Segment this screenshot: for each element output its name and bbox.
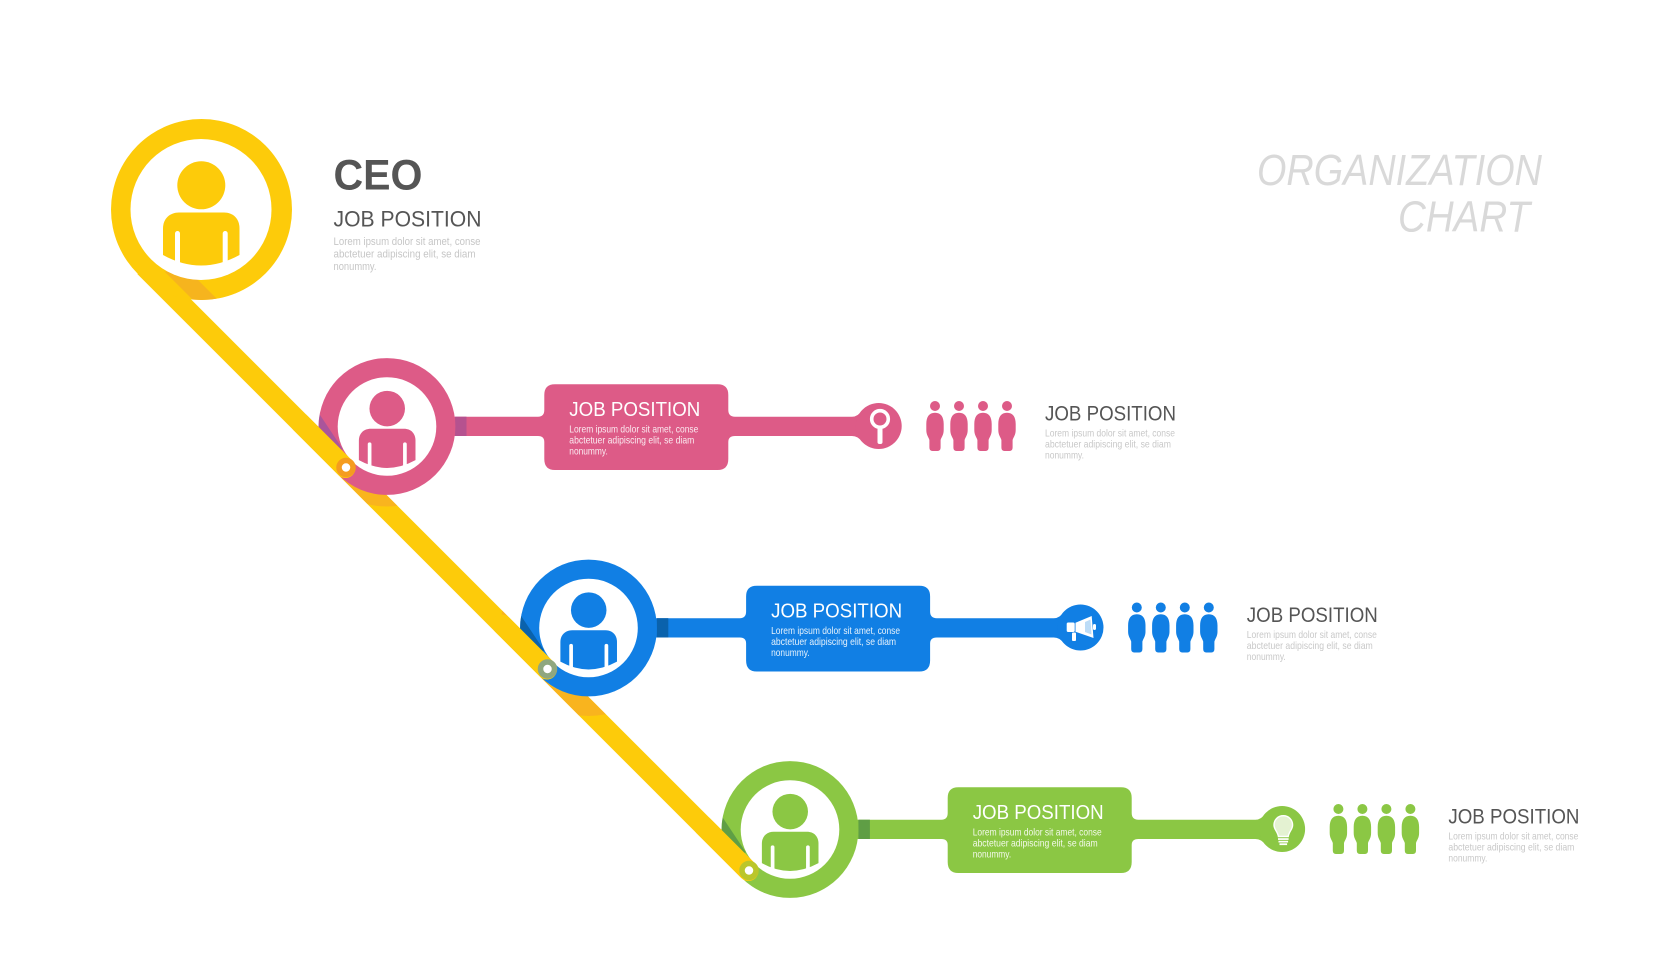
panel: blue position <box>494 560 1376 716</box>
yellow reporting line <box>144 267 748 871</box>
pink team text <box>1045 403 1176 462</box>
icon: team of four <box>1330 804 1419 854</box>
green team text: Lorem ipsum dolor sit amet, conse <box>1448 831 1579 843</box>
blue card text: Lorem ipsum dolor sit amet, conse <box>771 625 900 637</box>
CEO job position text: Lorem ipsum dolor sit amet, conse <box>334 236 480 248</box>
blue team text <box>1247 604 1378 663</box>
pink card text <box>569 398 700 458</box>
icon: magnifier <box>872 411 888 444</box>
blue team text: nonummy. <box>1247 651 1286 663</box>
green avatar node <box>704 761 858 898</box>
blue team text: JOB POSITION <box>1247 604 1378 627</box>
green connector shadow <box>858 820 870 839</box>
pink card text: Lorem ipsum dolor sit amet, conse <box>569 423 698 435</box>
CEO job position text <box>334 206 482 273</box>
pink team text: Lorem ipsum dolor sit amet, conse <box>1045 428 1175 440</box>
blue team text: Lorem ipsum dolor sit amet, conse <box>1247 629 1377 641</box>
green team text: JOB POSITION <box>1448 806 1579 829</box>
pink connector and card <box>450 384 902 470</box>
pink card text: nonummy. <box>569 446 608 458</box>
pink team text: abctetuer adipiscing elit, se diam <box>1045 439 1171 451</box>
pink connector shadow <box>455 417 466 436</box>
green card text: nonummy. <box>973 849 1011 861</box>
blue card text <box>771 600 902 659</box>
green card text: Lorem ipsum dolor sit amet, conse <box>973 826 1102 838</box>
blue connector and card <box>652 586 1104 672</box>
icon: CEO person <box>163 161 240 267</box>
CEO job position text: nonummy. <box>334 261 376 273</box>
pink card text: JOB POSITION <box>569 398 700 421</box>
icon: light bulb <box>1274 816 1293 845</box>
green card text <box>973 801 1104 861</box>
CEO job position text: JOB POSITION <box>334 206 482 232</box>
ring shadow <box>164 272 217 300</box>
icon: team of four <box>926 401 1016 451</box>
blue card text: abctetuer adipiscing elit, se diam <box>771 636 896 648</box>
blue avatar node <box>494 560 657 716</box>
pink card text: abctetuer adipiscing elit, se diam <box>569 435 694 447</box>
green team text <box>1448 806 1579 865</box>
CEO heading: CEO <box>334 152 422 200</box>
CEO job position text: abctetuer adipiscing elit, se diam <box>334 248 476 260</box>
pink team text: JOB POSITION <box>1045 403 1176 426</box>
pink team text: nonummy. <box>1045 450 1084 462</box>
panel: green position <box>704 761 1579 898</box>
blue team text: abctetuer adipiscing elit, se diam <box>1247 640 1373 652</box>
title: organization chart: ORGANIZATION <box>1257 146 1542 195</box>
title: organization chart: CHART <box>1398 192 1533 242</box>
CEO node <box>111 119 292 310</box>
green team text: nonummy. <box>1448 853 1487 865</box>
icon: team of four <box>1128 602 1218 652</box>
green team text: abctetuer adipiscing elit, se diam <box>1448 842 1575 854</box>
blue connector shadow <box>657 618 668 638</box>
icon: megaphone <box>1067 616 1096 641</box>
pink avatar node <box>300 346 467 506</box>
blue card text: JOB POSITION <box>771 600 902 623</box>
green connector and card <box>853 787 1305 873</box>
green card text: JOB POSITION <box>973 801 1104 824</box>
title: organization chart <box>1257 146 1542 242</box>
green card text: abctetuer adipiscing elit, se diam <box>973 838 1098 850</box>
blue card text: nonummy. <box>771 647 810 659</box>
panel: pink position <box>300 346 1176 506</box>
